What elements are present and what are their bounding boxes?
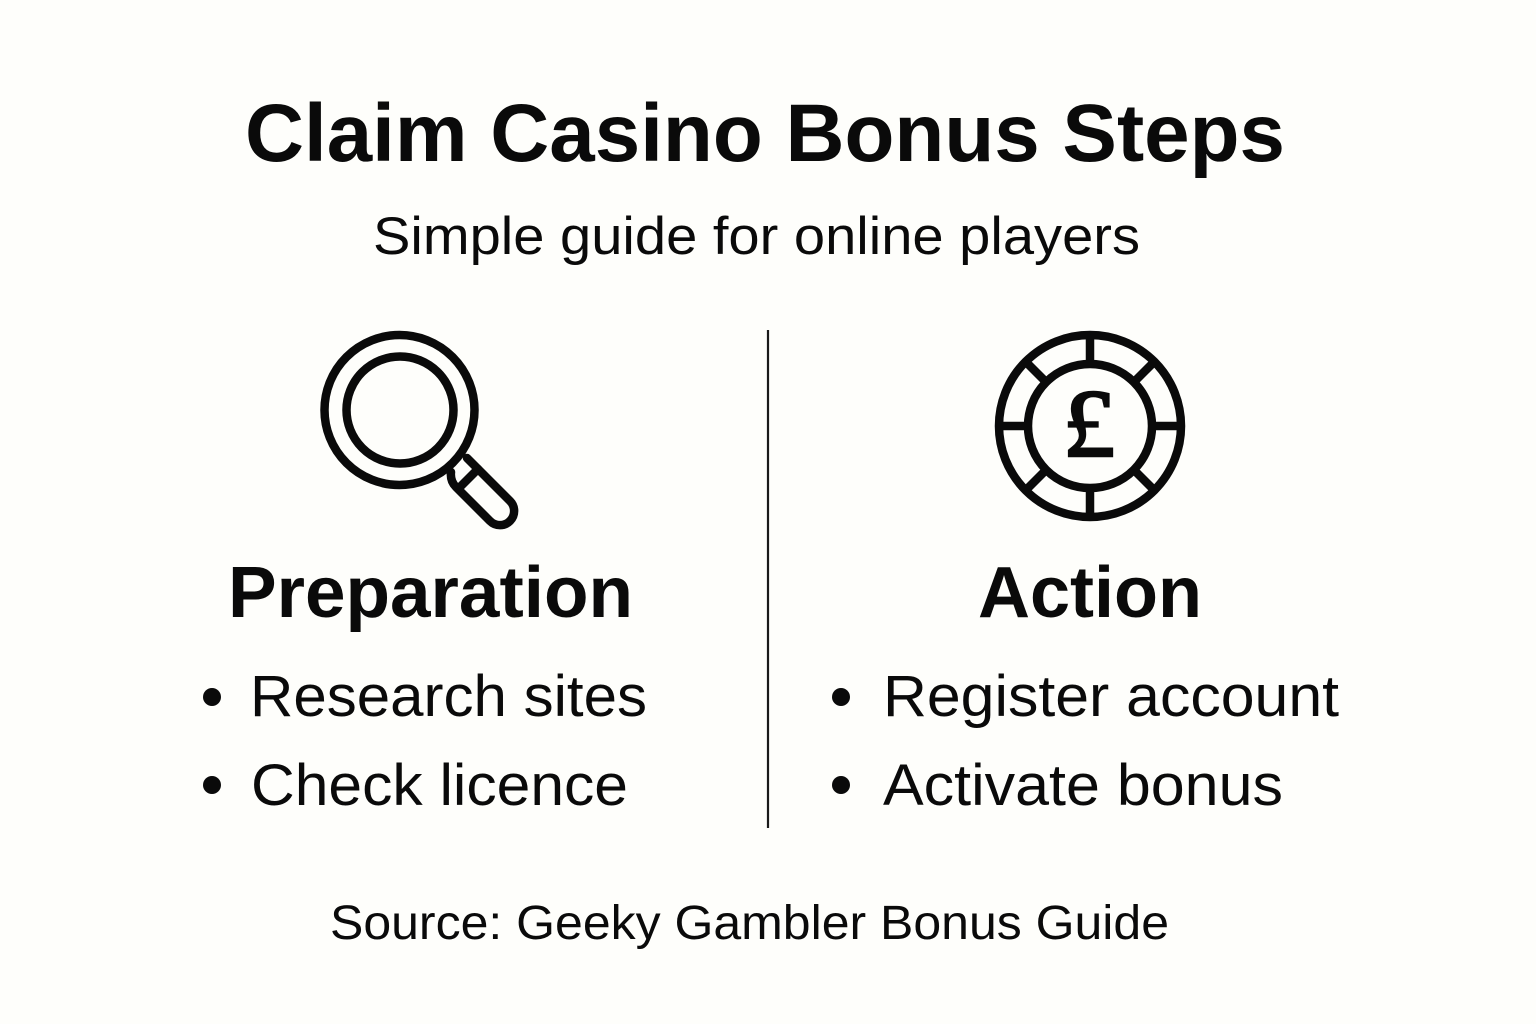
heading: preparation: Preparation bbox=[228, 553, 633, 633]
icon: pound casino chip: £ bbox=[1063, 370, 1115, 477]
icon: magnifying glass bbox=[324, 335, 514, 525]
bullet list: preparation: Research sites bbox=[250, 664, 647, 729]
bullet list: action: Activate bonus bbox=[883, 753, 1283, 818]
bullet list: action bbox=[832, 664, 1339, 818]
title: Claim Casino Bonus Steps bbox=[245, 88, 1285, 179]
icon: pound casino chip bbox=[999, 335, 1181, 517]
bullet list: action: Register account bbox=[883, 664, 1339, 729]
heading: action: Action bbox=[978, 553, 1202, 633]
panel: action bbox=[832, 335, 1339, 818]
subtitle: Simple guide for online players bbox=[373, 207, 1140, 266]
bullet list: preparation bbox=[203, 664, 647, 818]
panel: preparation bbox=[203, 335, 647, 818]
bullet list: preparation: Check licence bbox=[251, 753, 628, 818]
source note: Source: Geeky Gambler Bonus Guide bbox=[330, 897, 1169, 950]
